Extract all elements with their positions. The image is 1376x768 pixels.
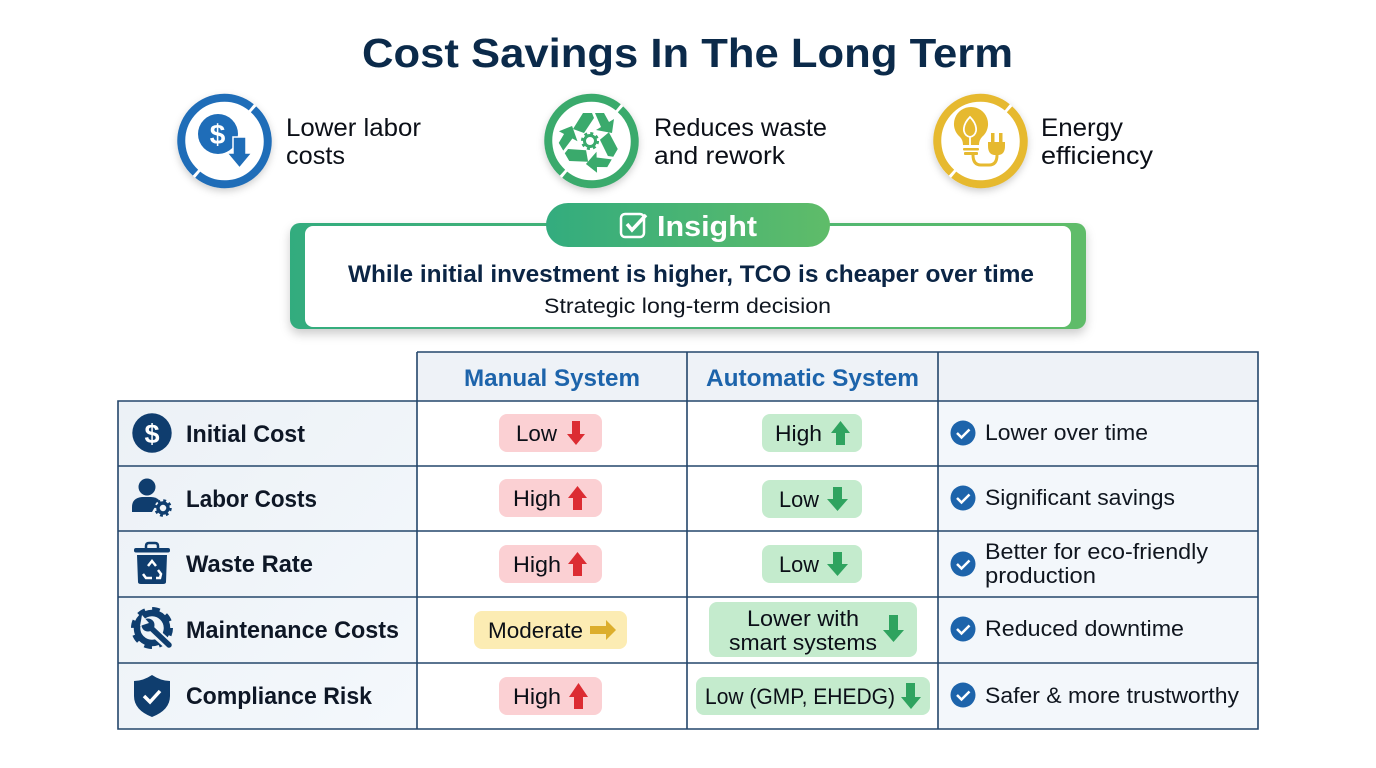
label: and rework bbox=[654, 142, 786, 170]
row: maintenance costs bbox=[134, 602, 1184, 657]
note: Safer & more trustworthy bbox=[985, 683, 1240, 708]
label: costs bbox=[286, 142, 345, 170]
label: Initial Cost bbox=[186, 421, 305, 448]
label: Lower labor bbox=[286, 114, 421, 142]
row: initial cost bbox=[132, 413, 1148, 453]
automatic: lower with smart systems bbox=[709, 602, 917, 657]
icon: bulb and plug bbox=[934, 94, 1028, 188]
header: manual system: Manual System bbox=[464, 365, 640, 392]
label: Waste Rate bbox=[186, 551, 313, 578]
icon: dollar with down arrow bbox=[178, 94, 272, 188]
icon: recycle with gear bbox=[544, 94, 638, 188]
automatic: high: High bbox=[775, 421, 822, 446]
manual: high: High bbox=[513, 486, 561, 511]
insight badge: Insight bbox=[657, 211, 757, 243]
manual: high bbox=[499, 677, 602, 715]
panel: insight bbox=[290, 203, 1086, 329]
note: production bbox=[985, 563, 1096, 588]
icon: dollar bbox=[132, 413, 172, 453]
label: Labor Costs bbox=[186, 486, 317, 513]
insight badge bbox=[546, 203, 830, 247]
icon: dollar: $ bbox=[144, 419, 160, 449]
automatic: low: Low bbox=[779, 487, 820, 512]
manual: high bbox=[499, 479, 602, 517]
label bbox=[286, 114, 421, 170]
label: Reduces waste bbox=[654, 114, 827, 142]
label: efficiency bbox=[1041, 142, 1154, 170]
manual: moderate bbox=[474, 611, 627, 649]
icon: gear and wrench bbox=[134, 610, 171, 647]
label: Compliance Risk bbox=[186, 683, 373, 710]
title: Cost Savings In The Long Term bbox=[362, 30, 1013, 76]
note: Significant savings bbox=[985, 485, 1175, 510]
label: Maintenance Costs bbox=[186, 617, 399, 644]
manual: high: High bbox=[513, 552, 561, 577]
note: Reduced downtime bbox=[985, 616, 1184, 641]
automatic: low gmp ehedg: Low (GMP, EHEDG) bbox=[705, 684, 895, 709]
automatic: low bbox=[762, 480, 862, 518]
note: Better for eco-friendly bbox=[985, 539, 1209, 564]
insight subtext: Strategic long-term decision bbox=[544, 295, 831, 318]
automatic: low: Low bbox=[779, 552, 820, 577]
manual: high: High bbox=[513, 684, 561, 709]
manual: low: Low bbox=[516, 421, 558, 446]
label bbox=[654, 114, 827, 170]
row: labor costs bbox=[132, 478, 1175, 518]
automatic: low gmp ehedg bbox=[696, 677, 930, 715]
icon: dollar with down arrow: $ bbox=[210, 119, 226, 150]
note bbox=[950, 539, 1209, 588]
label: Energy bbox=[1041, 114, 1124, 142]
insight message: While initial investment is higher, TCO is cheaper over time bbox=[348, 261, 1034, 288]
label bbox=[1041, 114, 1154, 170]
automatic: high bbox=[762, 414, 862, 452]
benefit: lower labor costs bbox=[178, 94, 421, 188]
benefit: reduces waste bbox=[544, 94, 827, 188]
automatic: low bbox=[762, 545, 862, 583]
note: Lower over time bbox=[985, 420, 1148, 445]
manual: low bbox=[499, 414, 602, 452]
automatic: lower with smart systems: Lower with bbox=[747, 606, 859, 631]
icon: shield bbox=[134, 675, 170, 717]
benefit: energy efficiency bbox=[934, 94, 1154, 188]
icon: person with gear bbox=[132, 478, 172, 516]
manual: moderate: Moderate bbox=[488, 618, 583, 643]
comparison table bbox=[118, 352, 1258, 729]
row: waste rate bbox=[134, 539, 1209, 588]
icon: recycling bin bbox=[134, 543, 170, 584]
header: automatic system: Automatic System bbox=[706, 365, 919, 392]
row: compliance risk bbox=[134, 675, 1240, 717]
automatic: lower with smart systems: smart systems bbox=[729, 630, 877, 655]
manual: high bbox=[499, 545, 602, 583]
